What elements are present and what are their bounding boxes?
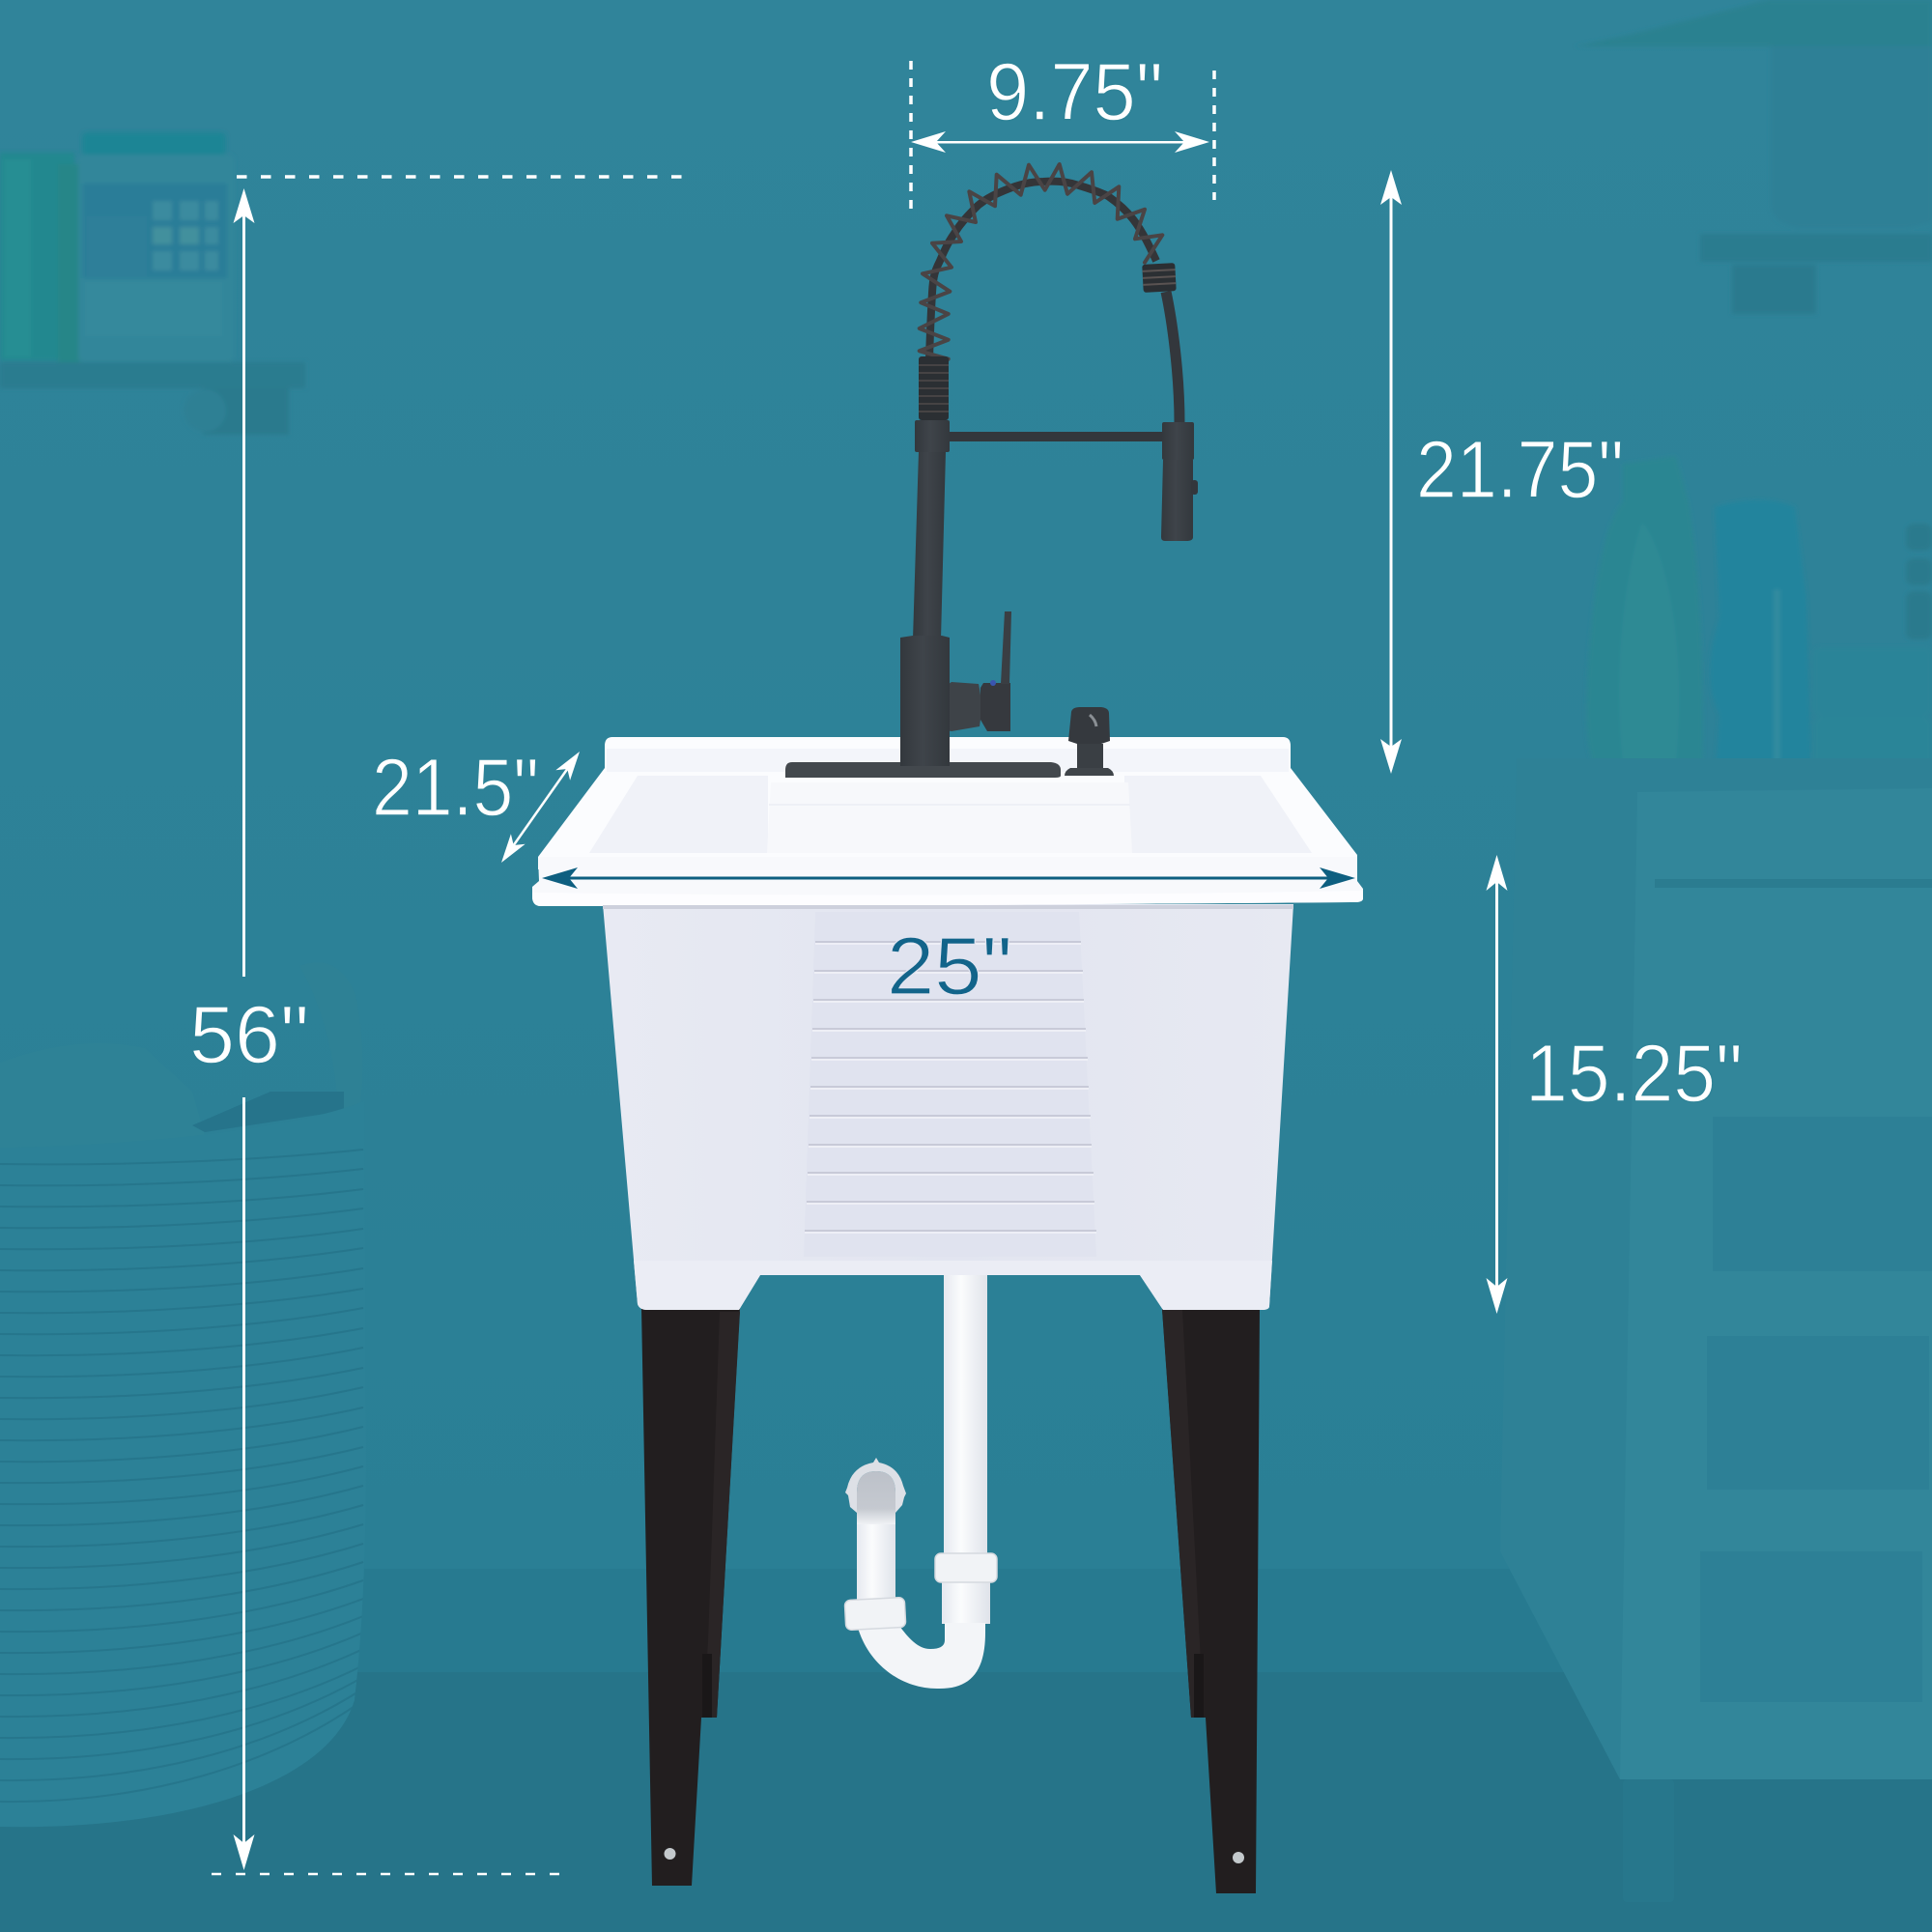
bar [950,432,1163,441]
leg: right [1162,1308,1260,1893]
dimension: tub height 15.25 in [1486,855,1743,1314]
gray pipe opening [857,1471,895,1524]
slip nut: upper cap [845,1458,906,1513]
dimension: depth 21.5 in: 21.5" [372,742,539,833]
dimension: tub height 15.25 in: 15.25" [1525,1028,1743,1119]
shelf with jar and book, upper left [0,132,305,435]
dimension: width 25 in [542,867,1355,1011]
dimension: depth 21.5 in [372,742,580,863]
slip nut: left [844,1597,906,1631]
screw: right leg [1233,1852,1244,1863]
sink tub [532,737,1363,1310]
detergent bottles and towels, right [1587,456,1932,788]
deck plate [785,762,1061,778]
screw: left leg [665,1848,676,1860]
U-bend [858,1623,985,1689]
backsplash shade [607,749,1289,772]
spring loops [920,164,1162,359]
dimension: faucet height 21.75 in [1380,170,1624,774]
dimension: faucet height 21.75 in: 21.75" [1416,424,1624,515]
ribbed coil: left [919,356,949,420]
collar: left [915,420,950,452]
handle indicator [990,680,996,686]
tub body [603,904,1293,1310]
lower sleeve [942,1582,990,1624]
basins [589,776,768,853]
ribbed coil: right [1142,263,1177,293]
lever [1001,611,1011,684]
spring coil tube [929,182,1156,359]
tailpiece [944,1275,987,1555]
mixer body [927,682,981,731]
slip nut: right [935,1553,997,1582]
faucet base [900,636,950,766]
collar: right [1162,422,1194,460]
shelf with bowl and plant, upper right [1575,0,1932,314]
trap arm [857,1517,895,1602]
handle hub [980,683,1010,731]
tub deck [538,737,1357,869]
column [913,451,946,639]
washboard panel [804,912,1096,1257]
dimension: overall height 56 in [189,177,683,1874]
soap dispenser [1065,707,1114,776]
dimension: faucet reach 9.75 in [911,46,1214,209]
cabinet, right [1500,758,1932,1902]
spray hose [1166,292,1179,423]
dimension: overall height 56 in: 56" [189,989,309,1080]
sprayer head [1161,460,1198,541]
front rim [532,857,1363,906]
faucet [785,164,1198,778]
dimension: faucet reach 9.75 in: 9.75" [986,46,1163,137]
leg: left [641,1308,740,1886]
drain pipe and P-trap [844,1275,997,1689]
laundry basket, lower left [0,1092,363,1827]
dimension: width 25 in: 25" [887,921,1012,1011]
